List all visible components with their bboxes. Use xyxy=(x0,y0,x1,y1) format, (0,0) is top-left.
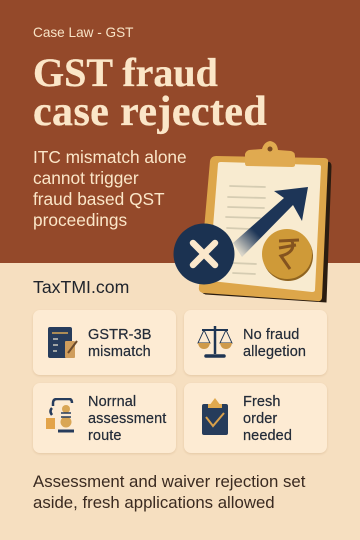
header band xyxy=(0,0,360,263)
label xyxy=(88,394,166,444)
label: No fraud xyxy=(243,327,299,343)
label xyxy=(243,327,306,360)
icon: document xyxy=(48,327,78,358)
card: normal assessment route xyxy=(33,383,176,453)
label: order xyxy=(243,411,277,427)
label xyxy=(88,327,152,360)
footer statement xyxy=(33,472,306,512)
card: GSTR-3B mismatch xyxy=(33,310,176,375)
footer statement: Assessment and waiver rejection set xyxy=(33,472,305,491)
label: assessment xyxy=(88,411,166,427)
subtitle: fraud based QST xyxy=(33,189,165,209)
label: Fresh xyxy=(243,394,281,410)
label: allegetion xyxy=(243,344,306,360)
rupee coin xyxy=(262,229,313,281)
eyebrow: case law: Case Law - GST xyxy=(33,25,133,40)
illustration: clipboard with arrow, rejection mark and rupee coin xyxy=(174,141,332,302)
rejection mark xyxy=(174,224,234,284)
label: mismatch xyxy=(88,344,151,360)
icon: checked clipboard xyxy=(202,398,228,435)
label xyxy=(243,394,292,444)
clipboard clip xyxy=(245,141,295,167)
title: GST fraud xyxy=(33,50,218,95)
subtitle: proceedings xyxy=(33,210,127,230)
icon: scales xyxy=(197,326,233,358)
label: route xyxy=(88,428,122,444)
title xyxy=(33,50,267,135)
brand: TaxTMI: TaxTMI.com xyxy=(33,277,129,297)
subtitle: cannot trigger xyxy=(33,168,139,188)
card: no fraud allegation xyxy=(184,310,327,375)
label: GSTR-3B xyxy=(88,327,152,343)
label: Norrnal xyxy=(88,394,136,410)
clipboard board xyxy=(199,156,332,302)
subtitle: ITC mismatch alone xyxy=(33,147,187,167)
subtitle xyxy=(33,147,187,230)
title: case rejected xyxy=(33,89,267,135)
arrow xyxy=(233,187,308,257)
label: needed xyxy=(243,428,292,444)
paper lines xyxy=(226,186,265,274)
footer statement: aside, fresh applications allowed xyxy=(33,493,275,512)
icon: assessment figure xyxy=(46,398,74,432)
card: fresh order needed xyxy=(184,383,327,453)
